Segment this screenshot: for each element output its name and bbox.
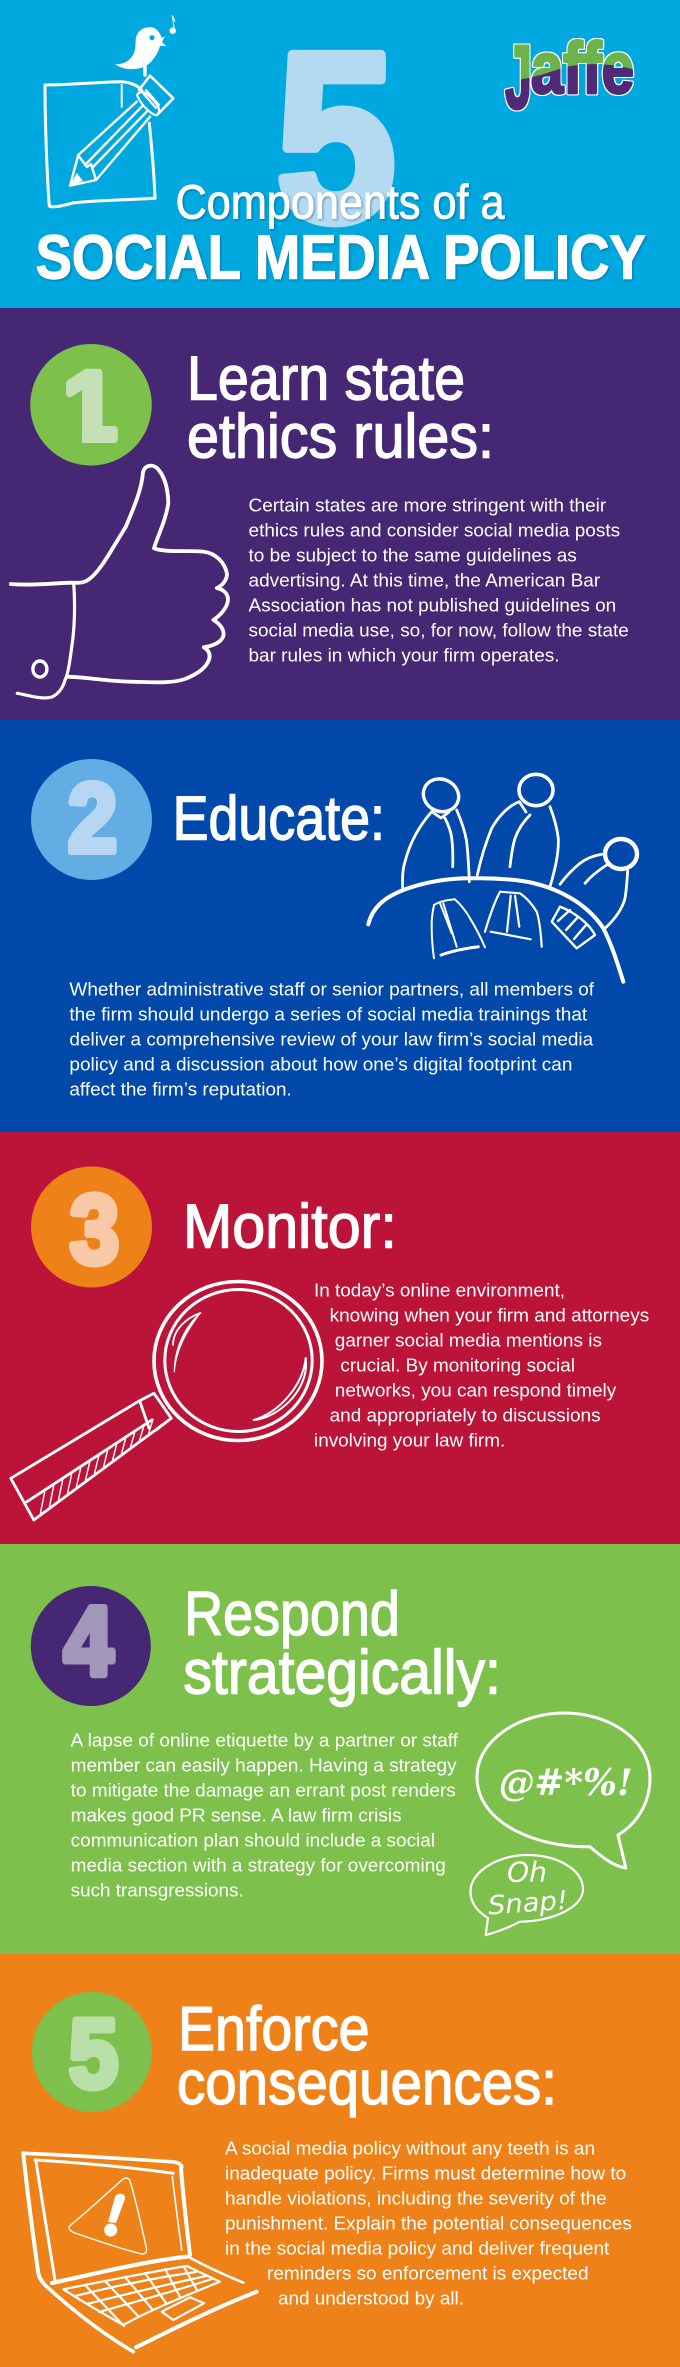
body text: A social media policy without any teeth is an (225, 2138, 595, 2158)
heading: Respond (184, 1580, 400, 1649)
body text: Certain states are more stringent with their (248, 496, 606, 516)
title line 1: Components of a (176, 176, 505, 229)
heading: Educate: (173, 784, 385, 853)
icon: speech bubble large: @#*%! (499, 1762, 633, 1804)
body text: makes good PR sense. A law firm crisis (71, 1806, 402, 1826)
icon: people around a table (368, 773, 637, 982)
heading: strategically: (183, 1638, 501, 1707)
body text: ethics rules and consider social media posts (248, 521, 620, 541)
body text: networks, you can respond timely (335, 1381, 616, 1401)
body text: Whether administrative staff or senior partners, all members of (69, 979, 595, 999)
heading: Enforce (178, 1995, 370, 2064)
body text: bar rules in which your firm operates. (248, 646, 560, 666)
number badge 4 (31, 1586, 151, 1706)
number badge 3: 3 (70, 1175, 119, 1284)
number badge 3 (31, 1166, 152, 1288)
body text: and understood by all. (278, 2288, 464, 2308)
number badge 1: 1 (63, 352, 117, 460)
icon: speech bubble small (470, 1855, 583, 1935)
body text: and appropriately to discussions (330, 1406, 601, 1426)
body text: Association has not published guidelines on (248, 596, 616, 616)
body text: member can easily happen. Having a strategy (71, 1756, 457, 1776)
heading: Learn state (187, 344, 465, 413)
heading (183, 1580, 501, 1707)
body text (69, 979, 595, 1099)
body text: knowing when your firm and attorneys (330, 1306, 649, 1326)
body text (248, 496, 629, 666)
icon: speech bubble small: Oh (507, 1856, 547, 1889)
number badge 5: 5 (69, 1999, 118, 2108)
logo: Jaffe: affe (531, 29, 634, 109)
body text: involving your law firm. (314, 1431, 505, 1451)
big number 5: 5 (276, 3, 396, 271)
panel: header (0, 0, 680, 308)
number badge 2: 2 (68, 764, 117, 872)
panel: 4 respond strategically (0, 1544, 680, 1954)
icon: notepad and pencil with bird (45, 16, 176, 207)
icon: thumbs up (11, 466, 228, 698)
body text: media section with a strategy for overcoming (71, 1856, 446, 1876)
body text: handle violations, including the severity of the (225, 2188, 607, 2208)
panel: 5 enforce consequences (0, 1954, 680, 2367)
body text: garner social media mentions is (335, 1331, 602, 1351)
body text (314, 1281, 649, 1451)
body text: advertising. At this time, the American Bar (248, 571, 600, 591)
body text: crucial. By monitoring social (340, 1356, 575, 1376)
heading: ethics rules: (187, 402, 494, 471)
heading: Monitor: (183, 1192, 397, 1261)
icon: speech bubble small: Snap! (487, 1886, 569, 1921)
number badge 5 (32, 1992, 152, 2112)
number badge 4: 4 (64, 1586, 113, 1696)
panel: 3 monitor (0, 1132, 680, 1544)
icon: magnifying glass (11, 1282, 322, 1520)
body text: inadequate policy. Firms must determine how to (225, 2163, 626, 2183)
body text (225, 2138, 632, 2308)
body text: In today’s online environment, (314, 1281, 565, 1301)
heading (177, 1995, 557, 2118)
number badge 1 (30, 344, 152, 466)
body text: to be subject to the same guidelines as (248, 546, 577, 566)
body text: to mitigate the damage an errant post renders (71, 1781, 456, 1801)
body text: affect the firm’s reputation. (69, 1079, 292, 1099)
body text: in the social media policy and deliver frequent (225, 2238, 609, 2258)
body text: communication plan should include a social (71, 1831, 435, 1851)
body text: the firm should undergo a series of social media trainings that (69, 1004, 587, 1024)
body text: A lapse of online etiquette by a partner or staff (71, 1731, 459, 1751)
panel: 1 learn state ethics rules (0, 308, 680, 720)
panel: 2 educate (0, 720, 680, 1132)
number badge 2 (31, 759, 152, 880)
icon: speech bubble large (477, 1713, 650, 1868)
body text: reminders so enforcement is expected (267, 2263, 588, 2283)
logo: Jaffe: J (505, 28, 532, 128)
body text: punishment. Explain the potential consequences (225, 2213, 632, 2233)
body text (71, 1731, 459, 1901)
body text: deliver a comprehensive review of your law firm’s social media (69, 1029, 594, 1049)
body text: such transgressions. (71, 1881, 244, 1901)
heading: consequences: (177, 2049, 557, 2118)
icon: laptop with warning (23, 2153, 257, 2352)
body text: policy and a discussion about how one’s digital footprint can (69, 1054, 572, 1074)
heading (187, 344, 494, 471)
body text: social media use, so, for now, follow the state (248, 621, 629, 641)
